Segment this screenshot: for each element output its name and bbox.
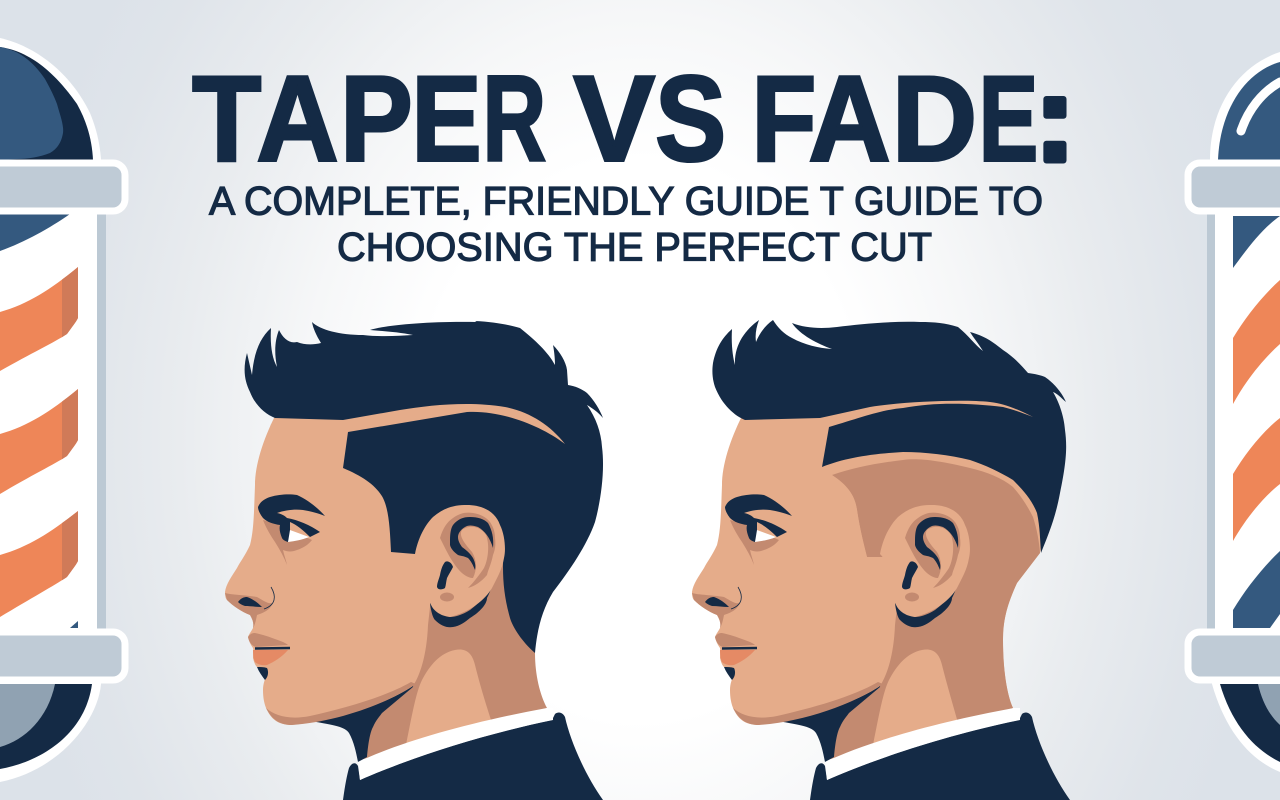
right pole top dome [1218,62,1280,160]
neck and faded side [737,395,1057,760]
left pole top cap [0,163,125,211]
eye and brow [258,494,325,565]
jaw shading [733,682,883,725]
ear [415,505,505,627]
left pole shaft [0,212,106,630]
left pole bottom dome [0,684,92,769]
title: P [340,50,413,186]
taper profile portrait [225,321,603,800]
right pole shaft [1207,212,1280,630]
eye and brow [725,494,792,565]
jacket [343,713,603,800]
title: E [979,50,1038,186]
title: T [192,50,261,186]
subtitle line 1: A COMPLETE, FRIENDLY GUIDE T GUIDE TO [209,180,1043,224]
shirt collar [358,708,553,780]
title: E [412,50,482,186]
right pole bottom dome [1220,684,1280,762]
lips [715,633,757,680]
ear [880,505,970,627]
left pole top dome [0,47,93,160]
hair [245,321,603,653]
left pole bottom cap [0,632,125,680]
right pole orange stripes [1233,280,1280,541]
title: R [483,50,546,186]
skin streak under the hair line [270,398,570,448]
title: F [752,50,816,186]
title: A [808,50,890,186]
jacket [810,713,1070,800]
hair [712,320,1066,553]
jaw shading [266,682,416,725]
nose [225,587,274,628]
right barber pole [1188,52,1280,772]
title: : [1035,50,1075,186]
under-jaw shadow [310,680,414,762]
shirt collar [825,708,1020,780]
right pole top cap [1188,163,1280,211]
face [692,410,897,725]
nose [692,587,741,628]
left pole orange stripes [0,260,78,617]
title: A [256,50,338,186]
lips [248,633,290,680]
title: V [574,50,655,186]
neck [360,560,547,760]
subtitle line 2: CHOOSING THE PERFECT CUT [337,226,932,270]
left barber pole [0,38,125,782]
under-jaw shadow [777,680,881,762]
right pole bottom cap [1188,632,1280,680]
fade profile portrait [692,320,1070,800]
face [225,410,440,725]
title: D [892,50,977,186]
title: S [655,50,726,186]
